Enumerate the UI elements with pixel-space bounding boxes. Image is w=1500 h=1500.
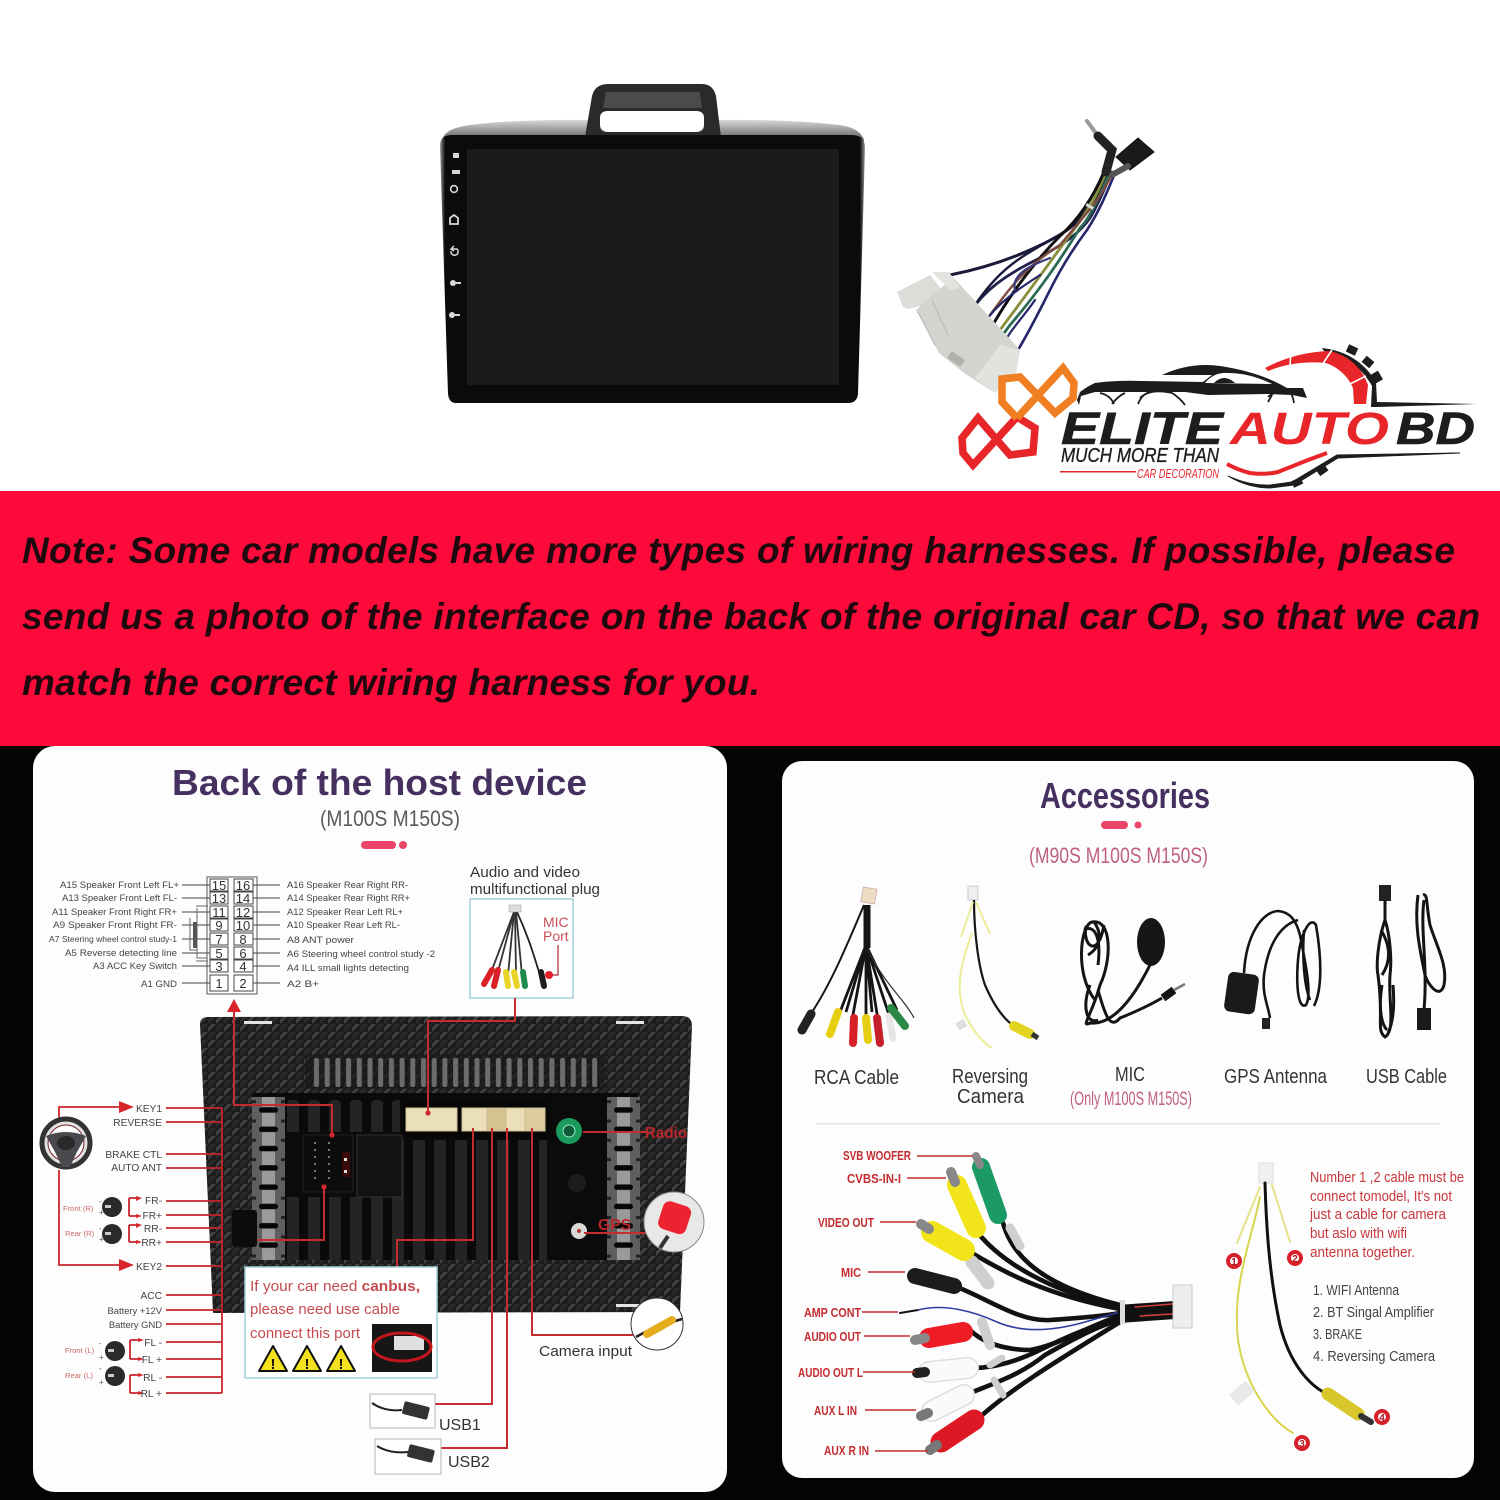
accent pill: [1101, 821, 1142, 829]
subheading: (M90S M100S M150S): [1029, 843, 1208, 868]
wiring connector diagram: 14: [236, 891, 250, 906]
harness labels: AUDIO OUT: [804, 1330, 861, 1344]
pin labels left: A13 Speaker Front Left FL-: [62, 893, 177, 904]
gps port: [571, 1223, 587, 1239]
canbus callout: connect this port: [250, 1325, 361, 1342]
reversing camera cable detail: 4: [1379, 1413, 1385, 1424]
BD: BD: [1396, 403, 1475, 454]
label: MIC: MIC: [1115, 1064, 1145, 1086]
side labels: Battery GND: [109, 1319, 162, 1330]
label: RCA cable: RCA Cable: [814, 1067, 899, 1089]
cable function list: 1. WIFI Antenna: [1313, 1283, 1400, 1299]
speaker knobs: [63, 1197, 125, 1387]
item: reversing camera: [956, 886, 1038, 1048]
panel: accessories: [782, 761, 1474, 1478]
image: head unit: [440, 84, 865, 403]
red note text: antenna together.: [1310, 1244, 1415, 1261]
side labels: KEY2: [136, 1262, 162, 1273]
pin labels left: A7 Steering wheel control study-1: [49, 935, 178, 944]
pin labels left: A11 Speaker Front Right FR+: [52, 907, 177, 918]
pin labels left: [49, 880, 179, 990]
car window: [1205, 373, 1272, 384]
camera input label: Camera input: [539, 1343, 633, 1360]
yellow plug 1: [951, 1172, 976, 1228]
pin labels right: A2 B+: [287, 979, 319, 990]
warning marks: !: [270, 1356, 276, 1373]
divider: [815, 1123, 1440, 1124]
side labels: FR-: [145, 1196, 162, 1207]
tagline: MUCH MORE THAN: [1061, 445, 1219, 467]
pin labels right: A16 Speaker Rear Right RR-: [287, 880, 408, 891]
speaker knobs: Front (L): [65, 1346, 95, 1355]
accent pill: [361, 841, 407, 849]
black module: [232, 1210, 257, 1247]
note line 3: match the correct wiring harness for you.: [22, 662, 760, 703]
red note text: [1309, 1169, 1464, 1261]
audio and video plug label: Audio and video: [470, 864, 580, 881]
side labels: REVERSE: [113, 1118, 162, 1129]
item: RCA cable: [802, 887, 914, 1043]
USB2 box: [375, 1439, 441, 1474]
reversing camera cable detail: [1228, 1163, 1388, 1450]
steering wheel icon: [42, 1119, 90, 1167]
speaker knobs: +: [99, 1353, 104, 1362]
black plug: [915, 1276, 954, 1286]
car silhouette: [1077, 365, 1307, 405]
tagline small: CAR DECORATION: [1137, 467, 1220, 481]
speaker knobs: -: [99, 1364, 102, 1373]
side labels: FR+: [142, 1211, 162, 1222]
fins: [285, 1100, 547, 1260]
warning marks: !: [338, 1356, 344, 1373]
handle inner grey panel: [603, 92, 702, 108]
wiring connector diagram: [182, 877, 280, 994]
canbus callout: please need use cable: [250, 1301, 400, 1318]
radio label: Radio: [645, 1125, 687, 1142]
side labels: RR-: [144, 1224, 162, 1235]
speaker knobs: +: [99, 1208, 104, 1217]
heading: Back of the host device: [172, 762, 587, 803]
note line 1: Note: Some car models have more types of wiring harnesses. If possible, please: [22, 530, 1455, 571]
white plug 2: [921, 1395, 964, 1416]
wiring connector diagram: 8: [239, 932, 247, 947]
red note banner: [0, 491, 1500, 746]
car window dome: [1214, 378, 1235, 383]
top white section: [0, 0, 1500, 491]
speaker knobs: -: [99, 1224, 102, 1233]
speaker knobs: Rear (R): [65, 1229, 95, 1238]
wiring connector diagram: 13: [212, 891, 226, 906]
harness labels: AUX R IN: [824, 1444, 869, 1458]
RCA harness detail: [900, 1156, 1192, 1450]
blue wire: [918, 1308, 1120, 1330]
speaker knobs: +: [99, 1378, 104, 1387]
side labels: BRAKE CTL: [105, 1150, 162, 1161]
connector block: [303, 1135, 402, 1197]
label: reversing camera: [952, 1066, 1028, 1108]
wiring connector diagram: 7: [215, 932, 223, 947]
pin labels left: A15 Speaker Front Left FL+: [60, 880, 179, 891]
USB2 label: USB2: [448, 1454, 490, 1471]
side buttons: [449, 153, 461, 318]
red arrows: [119, 999, 241, 1395]
wiring connector diagram: 12: [236, 905, 250, 920]
warning marks: [270, 1356, 344, 1373]
heading: Accessories: [1040, 775, 1210, 816]
harness label lines: [862, 1156, 973, 1451]
speedometer dividers: [1290, 350, 1366, 386]
red wires: device connectors: [234, 998, 646, 1448]
handle opening: [600, 111, 704, 132]
bottom gear teeth: [1291, 465, 1328, 488]
host device back: [200, 1016, 692, 1313]
wiring connector diagram: 10: [236, 918, 250, 933]
item: USB cables: [1377, 885, 1445, 1037]
pin labels right: A14 Speaker Rear Right RR+: [287, 893, 410, 904]
plugs: [1086, 121, 1154, 210]
bottom red arc: [1227, 453, 1327, 474]
speaker knobs: Front (R): [63, 1204, 94, 1213]
pin labels right: A8 ANT power: [287, 935, 355, 946]
label: USB cable: USB Cable: [1366, 1066, 1447, 1088]
red note text: but aslo with wifi: [1310, 1225, 1407, 1242]
harness labels: VIDEO OUT: [818, 1216, 874, 1230]
logo mark: orange knot: [1002, 368, 1074, 418]
handle: [585, 84, 721, 137]
audio and video plug label: multifunctional plug: [470, 881, 600, 898]
canbus callout: [245, 1267, 437, 1378]
wiring connector diagram: 4: [239, 959, 247, 974]
gear: [1322, 344, 1477, 407]
red plug 1: [915, 1332, 963, 1340]
reversing camera cable detail: 2: [1292, 1254, 1298, 1265]
wires: [950, 170, 1115, 350]
pin labels right: A12 Speaker Rear Left RL+: [287, 907, 403, 918]
gps antenna circle: [644, 1192, 704, 1252]
side labels: KEY1: [136, 1104, 162, 1115]
side labels: RR+: [141, 1238, 162, 1249]
device body: [440, 135, 865, 403]
gps label: GPS: [598, 1217, 631, 1234]
note line 2: send us a photo of the interface on the back of the original car CD, so that we can: [22, 596, 1480, 637]
wiring connector diagram: 15: [212, 878, 226, 893]
connector: [897, 272, 1020, 393]
side labels: RL -: [143, 1373, 162, 1384]
label: GPS antenna: GPS Antenna: [1224, 1066, 1328, 1088]
subheading: (M100S M150S): [320, 806, 460, 831]
wiring connector diagram: 5: [215, 946, 223, 961]
cable function list: 2. BT Singal Amplifier: [1313, 1305, 1434, 1321]
speaker knobs: Rear (L): [65, 1371, 93, 1380]
speaker knobs: -: [99, 1197, 102, 1206]
rails: [252, 1097, 285, 1260]
side labels: AUTO ANT: [111, 1163, 162, 1174]
white labels: [244, 1021, 644, 1307]
side labels: FL +: [142, 1355, 162, 1366]
harness labels: CVBS-IN-I: [847, 1172, 901, 1186]
wiring connector diagram: 11: [212, 905, 226, 920]
panel: back of the host device: [33, 746, 727, 1492]
red note text: Number 1 ,2 cable must be: [1310, 1169, 1464, 1186]
side labels: ACC: [140, 1291, 162, 1302]
green plug: [976, 1156, 998, 1215]
MIC port label: Port: [543, 928, 569, 944]
beige connectors: [406, 1108, 545, 1131]
port thumbnail: [372, 1324, 432, 1372]
side labels: [105, 1104, 163, 1400]
warning marks: !: [304, 1356, 310, 1373]
pin labels left: A9 Speaker Front Right FR-: [53, 920, 177, 931]
wire end dots: [321, 1110, 431, 1190]
ELITE: ELITE: [1061, 403, 1226, 454]
label: reversing camera: Reversing: [952, 1066, 1028, 1088]
bundle and comb connector: [1118, 1285, 1192, 1328]
image: wiring harness: [897, 121, 1154, 393]
wiring connector diagram: 6: [239, 946, 247, 961]
harness labels: [798, 1149, 911, 1458]
canbus callout: If your car need canbus,: [250, 1278, 420, 1295]
harness labels: AUDIO OUT L: [798, 1366, 863, 1380]
red note text: just a cable for camera: [1309, 1206, 1447, 1223]
cable function list: 4. Reversing Camera: [1313, 1349, 1436, 1365]
screen: [467, 149, 839, 385]
white plug 1: [917, 1368, 968, 1373]
cable function list: [1313, 1283, 1436, 1365]
MIC port label: MIC: [543, 914, 569, 930]
audio and video plug label: [470, 864, 600, 898]
USB1 label: USB1: [439, 1417, 481, 1434]
USB1 box: [370, 1394, 435, 1428]
red wire: steering and speaker bus: [59, 1107, 222, 1393]
wiring connector diagram: 3: [215, 959, 223, 974]
harness labels: MIC: [841, 1266, 861, 1280]
AUTO: AUTO: [1229, 403, 1389, 454]
red plug 2: [930, 1420, 974, 1450]
item: GPS antenna: [1223, 911, 1320, 1029]
pin labels left: A5 Reverse detecting line: [65, 948, 177, 959]
cable function list: 3. BRAKE: [1313, 1327, 1362, 1343]
MIC port label: [543, 914, 569, 944]
speedometer top arc: [1265, 351, 1368, 404]
wiring connector diagram: 1: [215, 976, 223, 991]
side labels: RL +: [141, 1389, 162, 1400]
label: reversing camera: Camera: [957, 1086, 1025, 1108]
yellow plug 2: [921, 1224, 964, 1250]
connector backing: [402, 1102, 550, 1138]
pin labels left: A3 ACC Key Switch: [93, 961, 177, 972]
harness labels: SVB WOOFER: [843, 1149, 911, 1163]
audio and video plug box: [470, 899, 573, 998]
port hole: [568, 1174, 586, 1192]
number badges: [1228, 1252, 1388, 1449]
warning triangles: [259, 1346, 355, 1371]
radio port: [556, 1118, 582, 1144]
pin labels left: A1 GND: [141, 979, 177, 990]
side labels: Battery +12V: [108, 1305, 163, 1316]
wiring connector diagram: 2: [239, 976, 247, 991]
item: MIC: [1081, 918, 1185, 1024]
logo mark: red knot: [962, 417, 1035, 465]
wheel arches: [1100, 391, 1294, 405]
harness labels: AMP CONT: [804, 1306, 861, 1320]
bottom black background: [0, 746, 1500, 1500]
recessed dark area: [252, 1093, 638, 1260]
top vents: [305, 1055, 605, 1089]
harness cables: [900, 1223, 1120, 1417]
camera circle: [631, 1298, 683, 1350]
red note text: connect tomodel, It's not: [1310, 1188, 1453, 1205]
speaker knobs: -: [99, 1339, 102, 1348]
cable tags: [972, 1228, 1020, 1395]
harness labels: AUX L IN: [814, 1404, 857, 1418]
logo: Elite Auto BD: [962, 344, 1477, 488]
pin labels right: [287, 880, 435, 990]
pin labels right: A6 Steering wheel control study -2: [287, 949, 435, 960]
reversing camera cable detail: 1: [1231, 1257, 1237, 1268]
label: MIC models: (Only M100S M150S): [1070, 1089, 1192, 1110]
pin labels right: A10 Speaker Rear Left RL-: [287, 920, 400, 931]
wiring connector diagram: 9: [215, 918, 223, 933]
bottom black arc: [1228, 453, 1460, 488]
reversing camera cable detail: 3: [1299, 1439, 1305, 1450]
side labels: FL -: [144, 1338, 162, 1349]
wiring connector diagram: 16: [236, 878, 250, 893]
speaker knobs: +: [99, 1235, 104, 1244]
tagline line: [1060, 471, 1136, 472]
pin labels right: A4 ILL small lights detecting: [287, 963, 409, 974]
